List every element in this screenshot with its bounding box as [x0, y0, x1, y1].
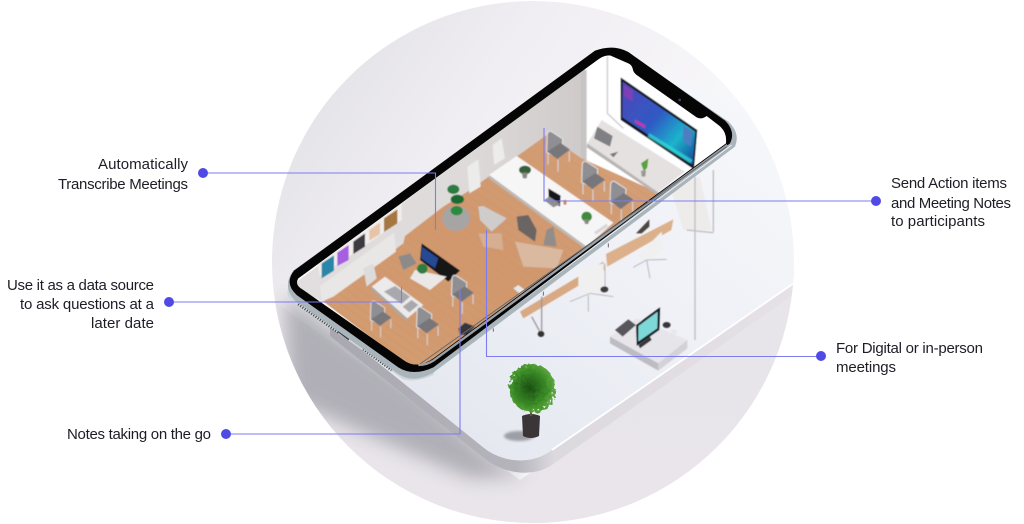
trunk: [530, 398, 532, 416]
circle lower tint: [273, 290, 800, 524]
callout: transcribe meetings: [58, 156, 208, 193]
dark wall tv left: [420, 243, 460, 282]
glass cabinet: [670, 177, 712, 230]
dining chair 3: [370, 301, 391, 337]
desk legs: [532, 297, 542, 335]
wall shelf: [587, 120, 685, 195]
art frame 5: [384, 209, 397, 232]
shelf monitor: [594, 127, 613, 147]
big stone planter: [442, 206, 470, 231]
laptop: [548, 188, 561, 207]
slab edge: [330, 270, 797, 473]
chair 2: [582, 161, 605, 202]
art frame 4: [369, 223, 380, 241]
wood floor: [323, 135, 660, 368]
callout: data source: [7, 277, 174, 332]
slab highlight: [552, 281, 797, 450]
dining table left: [372, 277, 423, 322]
room wall: [290, 67, 585, 303]
wooden desk upper: [606, 219, 673, 267]
metal frame: [288, 48, 737, 379]
plant on slab: [504, 364, 555, 441]
line: data source: [169, 287, 402, 302]
callout: action items: Send Action items: [891, 175, 1007, 192]
inner chrome band: [418, 145, 727, 365]
callout: digital or in-person: [816, 340, 983, 376]
callout: digital or in-person: meetings: [836, 359, 896, 376]
tv blue part: [421, 247, 438, 268]
shelf plant: [641, 158, 648, 172]
chair 3: [610, 181, 633, 222]
slab top surface: [366, 250, 794, 460]
shadow under phone and slab: [285, 295, 525, 478]
floor furniture outside the screen: [520, 170, 713, 371]
callout: action items: and Meeting Notes: [891, 195, 1011, 212]
small monitor on desk: [636, 219, 649, 233]
bezel lower-right metal detail: [420, 147, 727, 364]
vertical glass post: [687, 170, 713, 340]
screen contents: [290, 50, 737, 377]
callout: notes on the go: Notes taking on the go: [67, 426, 211, 443]
right room window frame: [607, 57, 623, 128]
wooden desk lower: [520, 262, 605, 318]
connector lines: [169, 128, 876, 434]
metal frame highlight: [430, 145, 732, 368]
line: digital or in-person: [486, 230, 821, 356]
wall screen: [621, 77, 697, 169]
white chairs behind table: [467, 138, 563, 268]
left wall art panel: [317, 202, 402, 278]
wood planks: [323, 135, 660, 368]
chair top: [547, 131, 570, 172]
media console: [610, 307, 687, 371]
dining chair 4: [363, 263, 377, 287]
partition pillar: [584, 70, 588, 161]
white chair B: [633, 232, 667, 278]
line: transcribe: [203, 173, 436, 230]
callout: transcribe meetings: Automatically: [98, 156, 188, 173]
callout: digital or in-person: For Digital or in-person: [836, 340, 983, 357]
art frame 3: [353, 233, 365, 254]
art frame 1: [322, 255, 334, 278]
spiral plant: [447, 185, 464, 215]
table plant A: [519, 166, 531, 174]
second white table: [410, 270, 447, 290]
foliage: [509, 364, 555, 412]
white chair A: [570, 263, 613, 312]
callout: action items: [871, 175, 1011, 230]
camera: [678, 99, 681, 101]
dark items on floor: [458, 323, 475, 335]
background circle: [270, 0, 800, 524]
long white table: [489, 156, 613, 249]
callout: data source: later date: [91, 315, 154, 332]
table plant B: [581, 212, 592, 222]
callout: action items: to participants: [891, 213, 985, 230]
callout: transcribe meetings: Transcribe Meetings: [58, 176, 188, 193]
black bezel: [290, 48, 732, 372]
white back room: [297, 55, 726, 344]
art frame 2: [337, 245, 349, 266]
phone: [287, 48, 737, 381]
small floor box: [513, 285, 525, 294]
plant shadow: [504, 431, 534, 441]
desk wheel: [538, 331, 544, 337]
line: notes on the go: [226, 290, 460, 434]
dining chair 2: [417, 307, 439, 345]
base slab: [330, 250, 794, 473]
console monitor: [636, 307, 660, 346]
small plant: [417, 264, 428, 274]
line: action items: [544, 128, 876, 201]
white sideboard: [320, 233, 396, 302]
phone side with speaker grilles: [287, 277, 437, 381]
callout: data source: to ask questions at a: [20, 296, 155, 313]
pot: [522, 414, 540, 438]
dining chairs: [452, 275, 474, 314]
callout: data source: Use it as a data source: [7, 277, 154, 294]
dining chair 5: [398, 253, 417, 270]
